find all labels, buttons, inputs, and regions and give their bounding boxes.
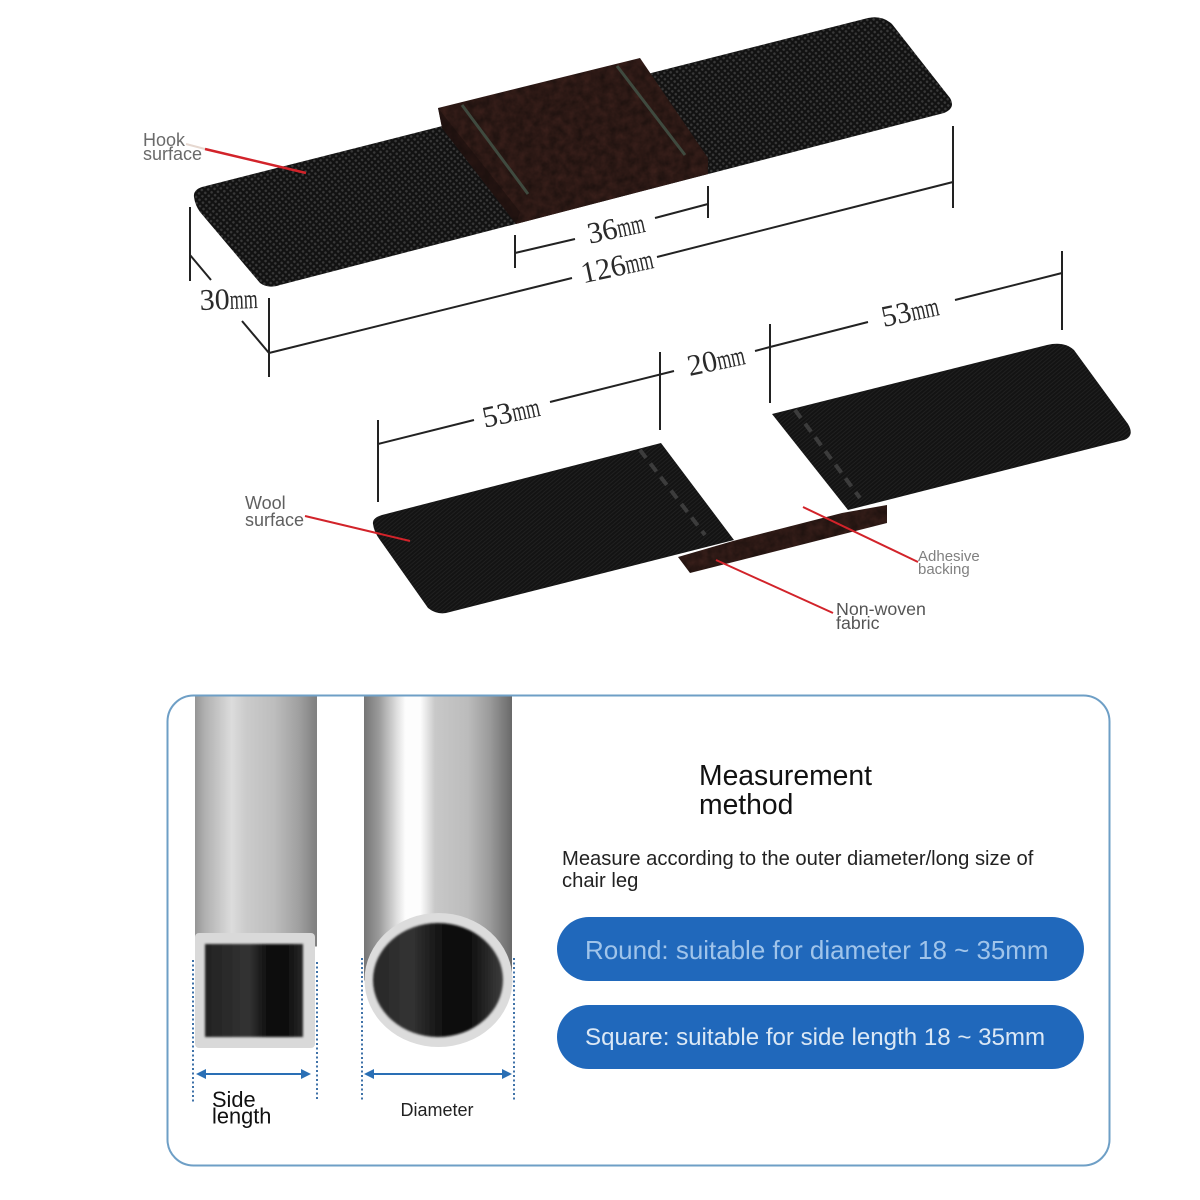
dimension: 30mm: 30mm	[199, 282, 258, 317]
label: adhesive backing: backing	[918, 561, 970, 578]
pill: round	[557, 917, 1084, 981]
label: non-woven fabric: fabric	[836, 613, 880, 633]
label: hook surface: surface	[143, 144, 202, 164]
instructions text: Measure according to the outer diameter/long size of	[562, 848, 1033, 870]
dimension: 126mm: 126mm	[578, 243, 656, 290]
dimension: side length	[193, 960, 317, 1128]
pill: square: Square: suitable for side length 18 ~ 35mm	[585, 1024, 1045, 1051]
dimension: 20mm: 20mm	[684, 338, 748, 383]
dimension: left 53mm: 53mm	[479, 390, 543, 435]
label: hook surface	[143, 130, 306, 173]
heading: method	[699, 788, 793, 820]
dimension: diameter	[362, 958, 514, 1120]
dimension: 30mm	[190, 207, 269, 353]
strap diagram: separated strap	[245, 251, 1131, 633]
icon: square tube	[195, 696, 317, 1048]
icon: round tube	[364, 696, 512, 1047]
label: non-woven fabric: Non-woven	[836, 599, 926, 619]
dimension: right 53mm	[770, 251, 1062, 403]
dimension: right 53mm: 53mm	[878, 289, 942, 334]
dimension: side length: length	[212, 1104, 271, 1128]
stitching	[640, 410, 860, 535]
hook strap body	[194, 17, 952, 287]
left wool piece	[373, 443, 734, 613]
panel: measurement method	[168, 696, 1110, 1166]
label: wool surface	[245, 493, 410, 541]
strap diagram: assembled strap	[143, 17, 953, 377]
dimension: side length: Side	[212, 1087, 256, 1112]
dimension: diameter: Diameter	[400, 1100, 474, 1120]
label: wool surface: Wool	[245, 493, 286, 513]
pill: round: Round: suitable for diameter 18 ~ 35mm	[585, 937, 1049, 965]
dimension: 126mm	[269, 126, 953, 377]
dimension: 36mm	[515, 186, 708, 268]
pill: square	[557, 1005, 1084, 1069]
dimension: 36mm: 36mm	[584, 206, 648, 251]
label: non-woven fabric	[716, 560, 926, 633]
dimension: left 53mm	[378, 352, 674, 502]
non-woven felt pad	[438, 58, 708, 224]
non-woven fabric strip	[678, 505, 887, 573]
label: adhesive backing: Adhesive	[918, 548, 980, 565]
instructions text: chair leg	[562, 870, 638, 892]
heading: Measurement	[699, 759, 872, 791]
right wool piece	[772, 344, 1131, 510]
label: adhesive backing	[803, 507, 980, 578]
label: hook surface: Hook	[143, 130, 186, 150]
label: wool surface: surface	[245, 510, 304, 530]
